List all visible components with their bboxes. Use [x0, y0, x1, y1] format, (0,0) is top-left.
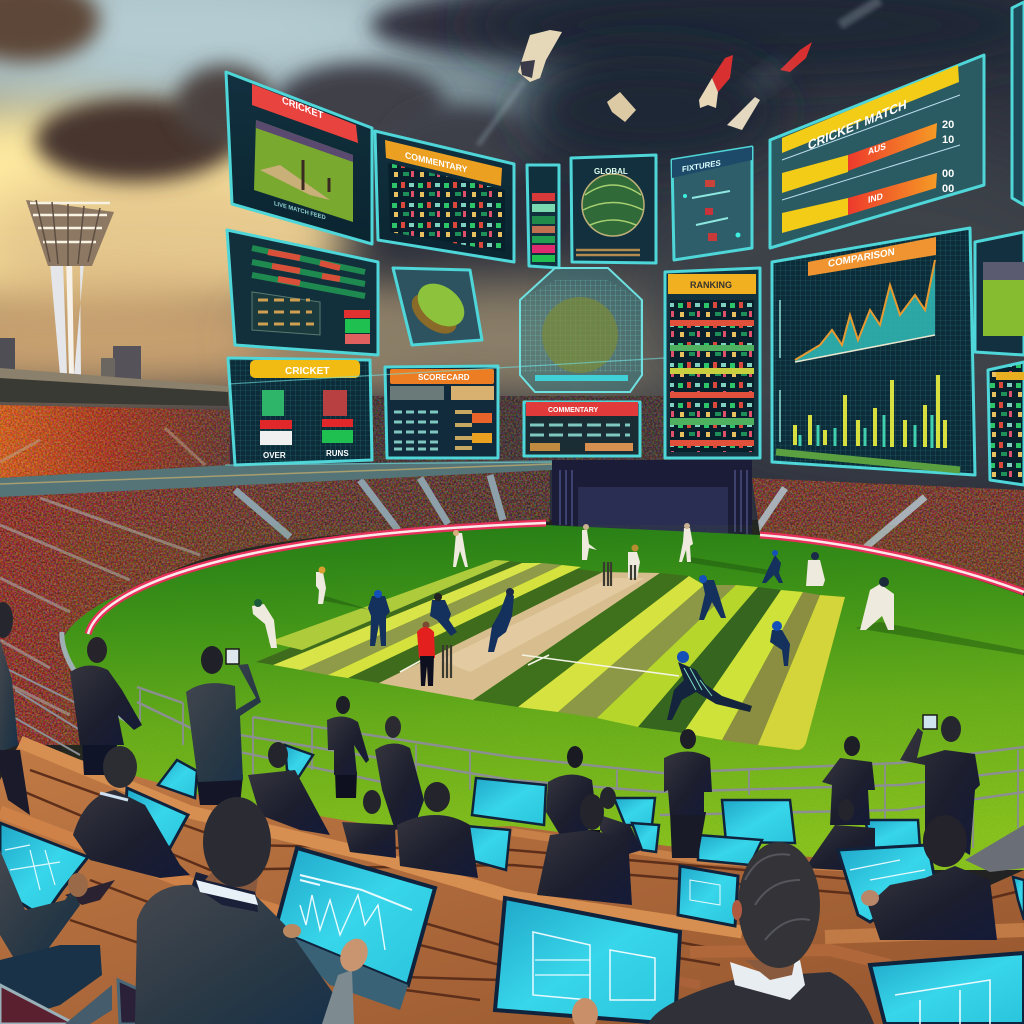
bars left — [260, 390, 292, 445]
panel: red live feed — [226, 72, 372, 244]
panel: yellow scoreboard: 20 — [942, 119, 954, 131]
wickets — [443, 562, 635, 678]
seated spectator row — [248, 770, 875, 905]
header: yellow — [782, 65, 959, 153]
left tablet — [0, 823, 115, 917]
standing official photographing — [186, 646, 261, 805]
lower left stand crowd — [0, 465, 555, 755]
panel: lower yellow: CRICKET — [285, 366, 329, 377]
panel: lower yellow: RUNS — [326, 449, 349, 458]
panel: yellow scoreboard: 10 — [942, 134, 954, 146]
bottom right tablet — [870, 953, 1024, 1024]
mini table — [252, 292, 320, 335]
panel: chart — [772, 228, 975, 475]
panel: lower yellow: OVER — [263, 451, 286, 460]
header: red — [526, 402, 638, 416]
header: yellow — [250, 360, 360, 378]
panel: yellow scoreboard: 00 — [942, 168, 954, 180]
fielders in blue — [368, 555, 790, 666]
panel: small status: FIXTURES — [682, 158, 721, 174]
holographic base line — [225, 358, 665, 465]
row two — [782, 198, 848, 233]
outfield grass — [62, 525, 1024, 870]
panel: right lower table — [988, 362, 1024, 485]
panel: orange commentary: COMMENTARY — [405, 150, 467, 175]
icon: floodlight tower — [26, 200, 114, 375]
panel: lower orange — [385, 366, 498, 458]
standing official F — [664, 729, 712, 858]
front centre official — [648, 842, 874, 1024]
header: orange — [808, 237, 936, 276]
standing official left edge — [0, 602, 30, 815]
panel: yellow red list — [665, 268, 760, 458]
standing official G — [822, 736, 875, 825]
panel: small status — [672, 147, 752, 260]
panel: right edge top — [1012, 2, 1024, 205]
panel: ball — [393, 268, 482, 345]
standing official C — [327, 696, 369, 798]
stadium roof — [0, 368, 228, 406]
indicator bars — [532, 193, 555, 262]
central stage screen — [552, 460, 752, 537]
player helmets — [254, 523, 889, 631]
panel: lower orange: SCORECARD — [418, 373, 470, 382]
right stand crowd — [752, 478, 1024, 588]
standing official photographing right — [900, 715, 980, 855]
panel: yellow scoreboard: AUS — [868, 141, 886, 157]
panel: yellow scoreboard: 00 — [942, 183, 954, 195]
bars right — [322, 390, 353, 443]
header: orange — [390, 369, 494, 384]
right seated official with tablet — [838, 815, 997, 940]
fielders in white — [252, 528, 894, 648]
table of scores — [388, 163, 505, 252]
front seated official — [135, 797, 373, 1024]
panel: yellow scoreboard — [770, 55, 984, 248]
seated spectator heads — [268, 742, 854, 830]
panel: green red stats — [227, 230, 378, 355]
panel: chart: COMPARISON — [828, 247, 895, 270]
stat bars — [252, 248, 365, 296]
city skyline — [0, 338, 141, 380]
upper stand crowd — [0, 405, 230, 478]
panel: dome hologram — [520, 268, 642, 392]
floating rockets — [478, 0, 880, 145]
header: orange — [385, 140, 502, 186]
mini legend — [344, 310, 370, 344]
bar chart — [795, 375, 945, 448]
panel: yellow scoreboard: CRICKET MATCH — [808, 96, 907, 153]
umpire in red — [417, 622, 435, 686]
panel: red live feed: LIVE MATCH FEED — [274, 201, 326, 222]
panel: globe: GLOBAL — [594, 167, 628, 176]
seated official with tablet — [73, 746, 190, 878]
sky background — [0, 0, 1024, 520]
header: yellow — [668, 274, 756, 294]
panel: orange commentary — [375, 131, 514, 262]
panel: slim indicators — [527, 165, 559, 268]
panel: yellow scoreboard: IND — [868, 191, 883, 205]
standing official E — [546, 746, 600, 835]
panel: red live feed: CRICKET — [282, 95, 323, 122]
lower centre tablet — [495, 898, 680, 1024]
boundary rope advertising — [62, 523, 1024, 722]
screen: match feed — [254, 120, 353, 222]
player shadows — [320, 557, 1024, 655]
wooden benches — [0, 742, 1024, 1024]
row one — [782, 155, 848, 193]
left seated official — [0, 850, 102, 1024]
panel: right green screen — [975, 232, 1024, 355]
diving fielder — [667, 651, 752, 720]
clouds — [0, 0, 1024, 185]
seat backs — [0, 980, 215, 1024]
standing official D — [375, 716, 424, 830]
header: red — [252, 84, 358, 143]
panel: lower red: COMMENTARY — [548, 407, 598, 414]
front tablet with chart — [275, 848, 435, 1010]
crowd behind lower panels — [370, 396, 670, 470]
panel: lower red — [524, 402, 640, 456]
back row tablets — [158, 745, 1024, 920]
concourse band — [0, 460, 552, 497]
railing — [5, 668, 1024, 848]
cricket pitch stripes — [256, 560, 845, 750]
grey walkway at right — [965, 825, 1024, 872]
area chart — [795, 260, 935, 362]
panel: yellow red list: RANKING — [690, 280, 732, 290]
standing official with arm out — [70, 637, 142, 775]
official with tablet middle — [678, 866, 738, 926]
panel: globe — [571, 155, 656, 263]
panel: lower yellow — [228, 358, 372, 465]
